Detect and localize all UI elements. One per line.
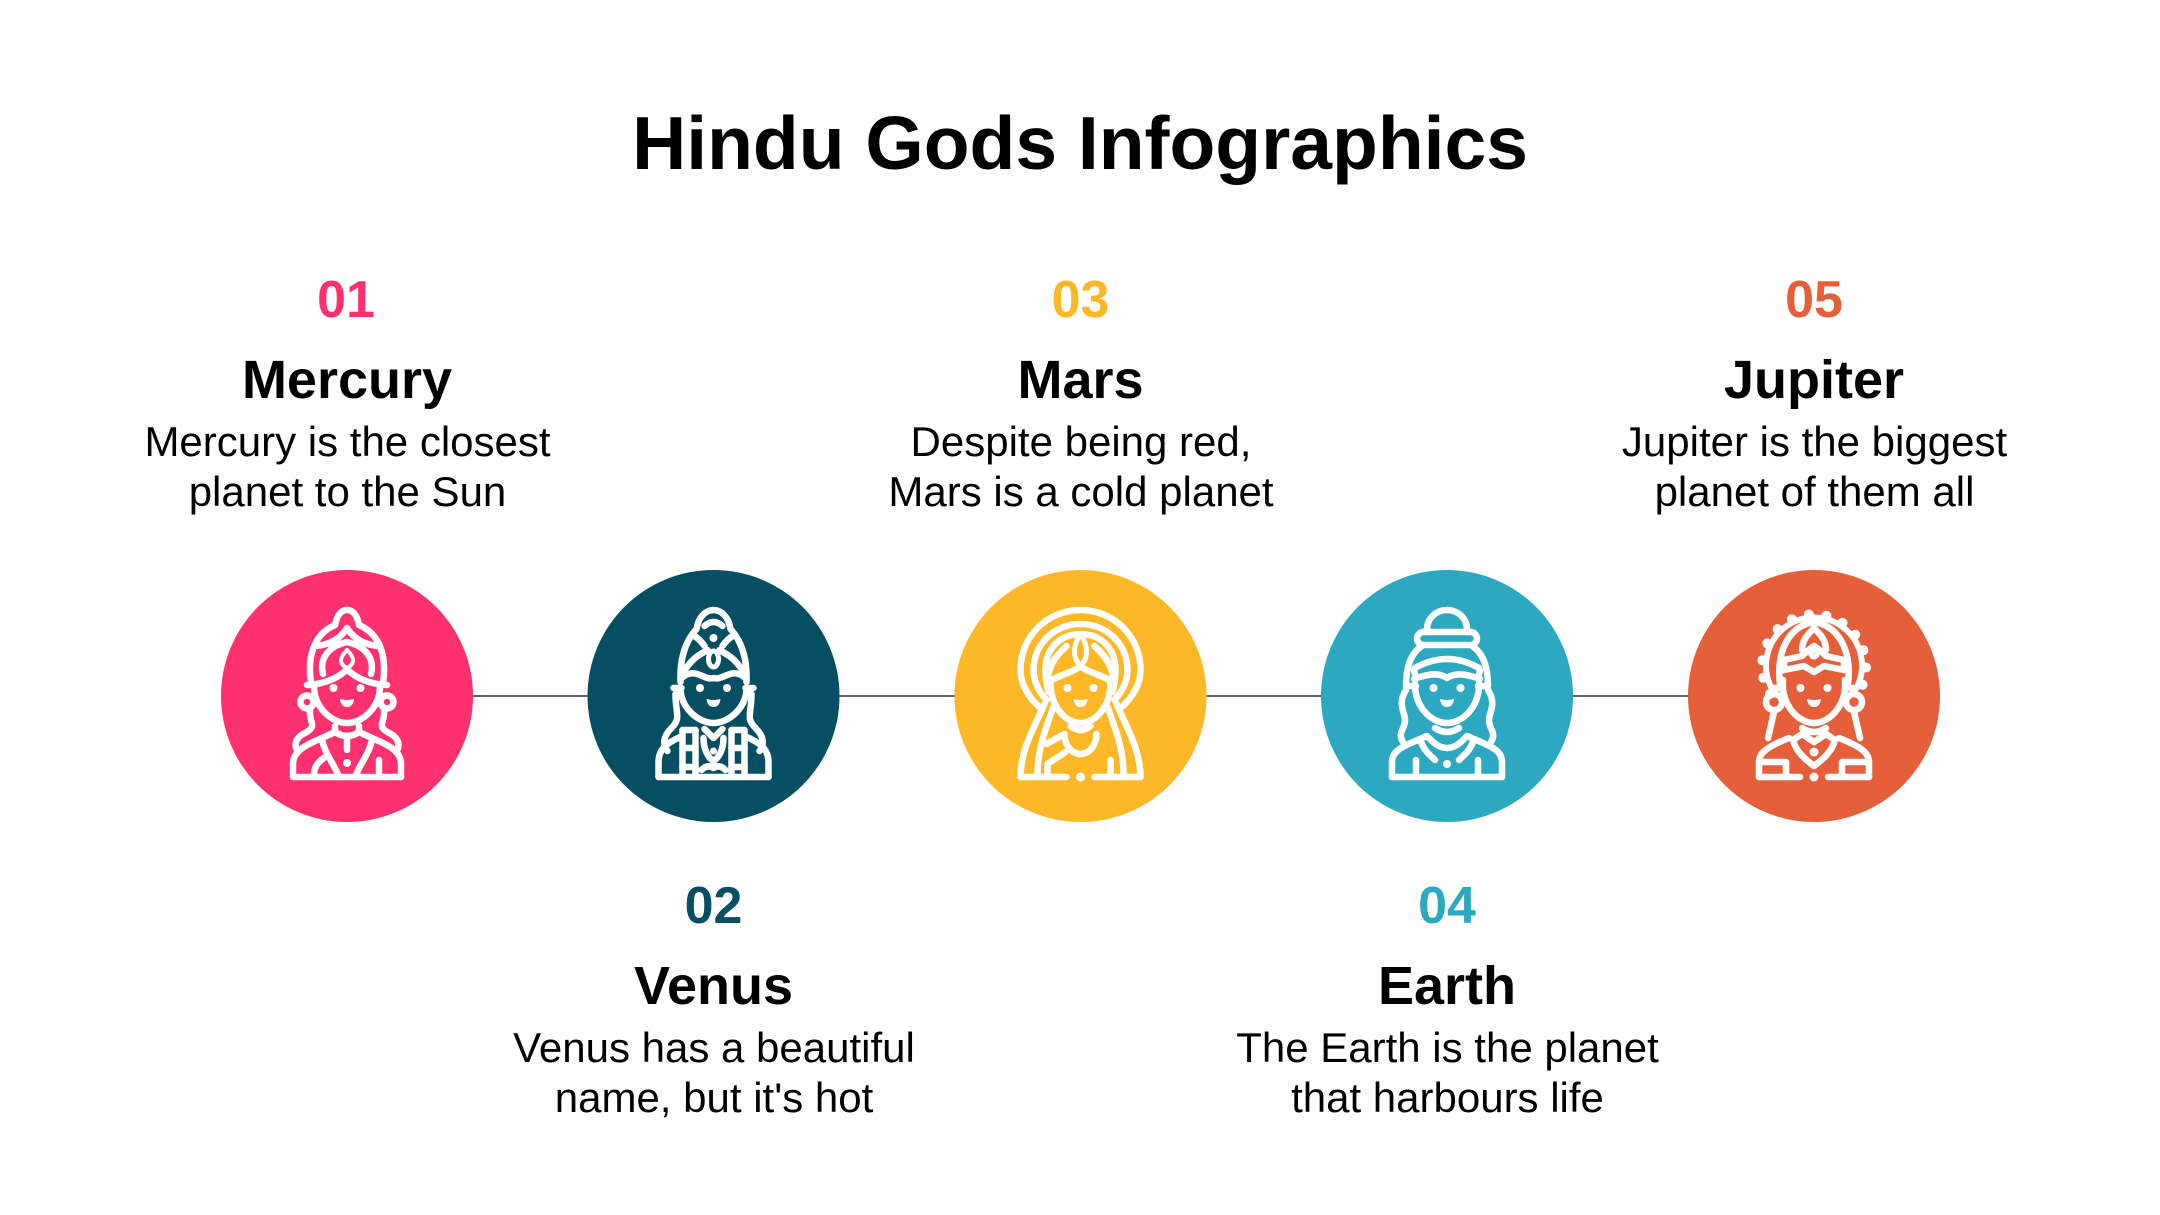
title: Hindu Gods Infographics [632,101,1528,185]
circle: Mars [954,570,1206,822]
icon: goddess with halo [1020,610,1140,782]
description: Earth: that harbours life [1291,1074,1604,1121]
number 02: 02 [685,877,742,935]
number 03: 03 [1052,271,1109,329]
panel: 05 Jupiter [1622,271,2007,822]
panel: 03 Mars [888,271,1274,822]
panel: 02 Venus [513,570,915,1121]
description: Jupiter: Jupiter is the biggest [1622,418,2007,465]
description: Venus: Venus has a beautiful [513,1024,915,1071]
circle: Earth [1321,570,1573,822]
icon: goddess with flame crown [293,610,401,777]
panel: 01 Mercury [144,271,551,822]
circle: Mercury [221,570,473,822]
panel: 04 Earth [1236,570,1659,1121]
number 01: 01 [317,271,375,329]
heading: Venus: Venus [634,956,793,1016]
heading: Mercury: Mercury [242,350,452,410]
description: Mercury: Mercury is the closest [144,418,551,465]
heading: Earth: Earth [1378,956,1516,1016]
description: Earth: The Earth is the planet [1236,1024,1659,1071]
number 05: 05 [1785,271,1843,329]
icon: goddess with dome crown [1392,610,1502,777]
circle: Jupiter [1688,570,1940,822]
icon: goddess with tall crown [658,610,768,777]
icon: goddess with sun crown [1759,614,1869,782]
description: Mars: Mars is a cold planet [888,468,1274,515]
heading: Mars: Mars [1017,350,1144,410]
description: Mercury: planet to the Sun [189,468,506,515]
description: Mars: Despite being red, [911,418,1251,465]
circle: Venus [588,570,840,822]
description: Venus: name, but it's hot [555,1074,874,1121]
heading: Jupiter: Jupiter [1724,350,1904,410]
number 04: 04 [1418,877,1476,935]
description: Jupiter: planet of them all [1655,468,1974,515]
connector line [347,695,1814,697]
